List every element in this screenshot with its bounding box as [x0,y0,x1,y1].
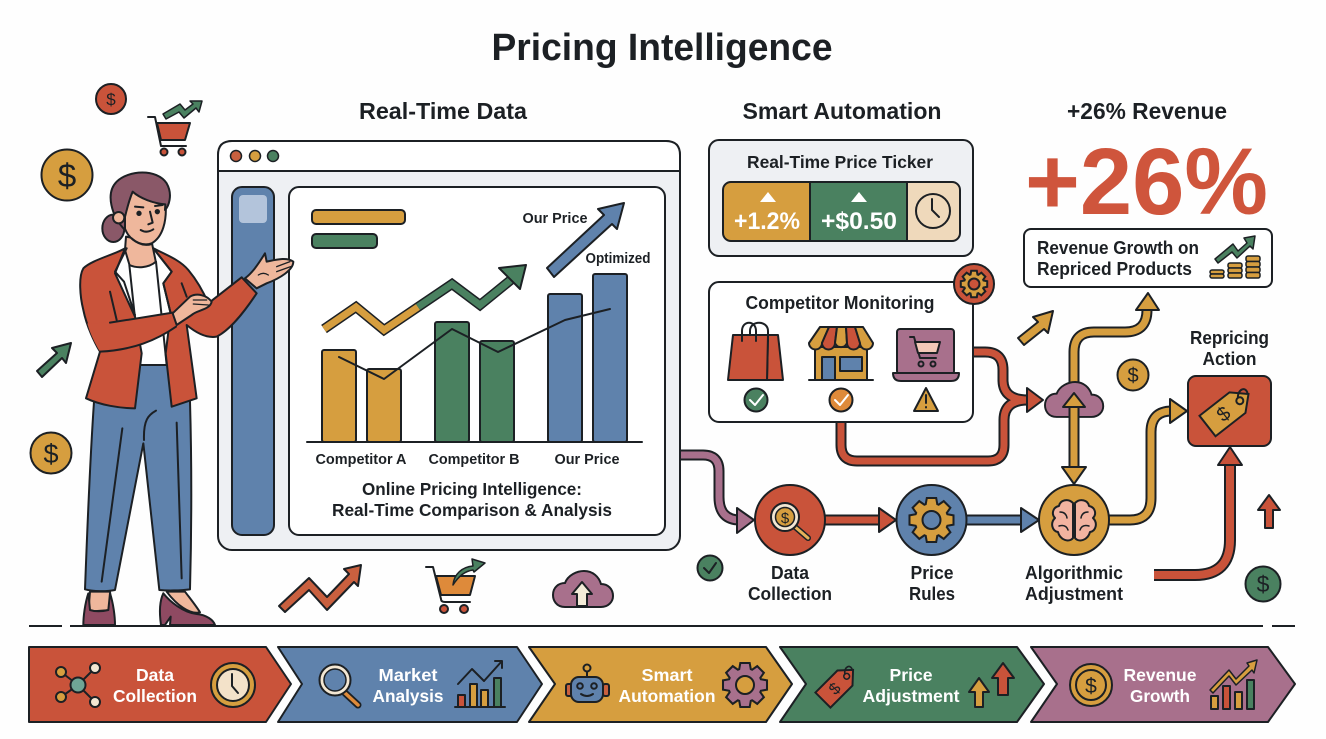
icon: red zigzag arrow [279,565,361,612]
label [1124,665,1197,706]
icon: cloud [1045,382,1103,417]
window sidebar [232,187,274,535]
label: optimized: Optimized [586,251,650,267]
step label: Collection [748,584,832,604]
callout text: Repriced Products [1037,259,1192,279]
chart caption: Real-Time Comparison & Analysis [332,500,612,520]
chart caption [332,479,612,520]
step: price rules [896,485,966,604]
step label: Adjustment [1025,584,1123,604]
icon: coins with rising arrow [1210,236,1260,278]
torso, head and arms [80,172,293,408]
icon: magnifier dollar: $ [781,510,790,527]
repricing action icon [1188,376,1271,446]
legend bars [312,210,405,248]
process chevron: market analysis [278,647,542,722]
icon: green dollar coin [1246,566,1280,602]
label: Data [136,665,174,685]
arrow: window to data collection [681,455,754,533]
icon: gear [909,498,954,542]
icon: magnifier [320,664,358,705]
callout: revenue growth [1024,229,1272,287]
step label: Price [910,563,954,583]
trend line [339,309,610,379]
step label: Algorithmic [1025,563,1123,583]
small red up arrow [1258,495,1280,528]
icon: price tag: $ [825,679,845,699]
label: Collection [113,686,197,706]
ticker strip: +1.2% [734,208,800,235]
label: Growth [1130,686,1190,706]
ground line [29,625,1295,627]
callout text: Revenue Growth on [1037,238,1199,258]
arrow: price rules to algorithm [966,508,1039,532]
big metric +26%: +26% [1025,129,1268,235]
two-way arrow: cloud and algorithm [1062,393,1086,484]
bar chart [307,274,642,442]
step label: Rules [909,584,955,604]
panel: real-time price ticker [709,140,973,256]
icon: red dollar coin: $ [106,90,116,109]
icon: cart with rising arrow [148,101,202,156]
icon: dollar coin: $ [1085,675,1097,698]
label: Revenue [1124,665,1197,685]
heading: real-time data: Real-Time Data [359,98,527,124]
label [113,665,197,706]
repricing action label: Repricing [1190,328,1269,348]
label: Adjustment [862,686,960,706]
panel: competitor monitoring [709,282,973,422]
arrow: algorithm to repricing [1106,399,1187,520]
label [862,665,960,706]
icon: gold coin near cloud: $ [1127,365,1139,387]
repricing action icon: $ [1213,402,1235,427]
icon: red dollar coin [96,84,126,114]
small gold arrow [1018,311,1053,345]
browser window panel [218,141,680,550]
axis labels: Competitor A [316,452,407,468]
label: Price [890,665,933,685]
label: Smart [642,665,693,685]
chart caption: Online Pricing Intelligence: [362,479,582,499]
icon: shopping bag [728,323,783,380]
process chevron: price adjustment [780,647,1044,722]
icon: network [56,663,100,707]
heading: revenue: +26% Revenue [1067,98,1227,124]
process chevron: smart automation [529,647,792,722]
icon: storefront [809,327,873,380]
title: Pricing Intelligence [492,27,832,69]
label: our price: Our Price [522,211,588,227]
monitoring heading: Competitor Monitoring [746,293,934,313]
axis labels: Our Price [554,452,620,468]
repricing action label [1190,328,1269,369]
step: algorithmic adjustment [1025,485,1123,604]
arrow: data collection to price rules [825,508,896,532]
icon: large gold dollar coin [42,150,92,200]
arrow: cloud up to revenue [1074,293,1159,390]
connector: competitor to cloud [841,352,1043,461]
person presenting [80,172,293,625]
icon: large gold dollar coin: $ [58,157,76,194]
legs and shoes [83,362,215,625]
icon: clock [211,663,255,707]
ticker strip [723,182,960,241]
icon: clock [916,194,950,228]
repricing action label: Action [1202,349,1256,369]
icon: settings gear badge [954,264,994,304]
blue rising arrow [547,203,624,277]
label [372,665,444,706]
process chevron: data collection [29,647,291,722]
icon: growth chart [1210,660,1257,709]
step: data collection [748,485,832,604]
zigzag trend arrow [324,265,526,330]
label [618,665,716,706]
icon: gold dollar coin lower [30,432,72,474]
icon: upload cloud [553,571,613,607]
icon: gear [723,663,767,707]
process chevron: revenue growth [1031,647,1295,722]
icon: gold coin near cloud [1118,360,1148,390]
label: Analysis [372,686,444,706]
step label: Data [771,563,810,583]
axis labels [316,452,620,468]
icon: green rising arrow [37,343,71,377]
icon: dollar coin [1070,664,1112,706]
icon: bar chart [455,661,505,707]
label: Automation [618,686,716,706]
arrow: up to repricing [1154,447,1242,575]
ticker strip: +$0.50 [821,208,897,235]
heading: smart automation: Smart Automation [742,98,942,124]
step label [1025,563,1123,604]
icon: brain [1052,500,1096,540]
ticker heading: Real-Time Price Ticker [747,152,933,172]
icon: gold dollar coin lower: $ [43,439,59,469]
label: Market [378,665,438,685]
icon: robot [566,664,609,702]
step label [909,563,955,604]
status icons [744,388,938,412]
icon: green dollar coin: $ [1257,571,1270,597]
icon: laptop cart [893,329,959,381]
icon: cart with arrow [426,559,485,613]
window control dots [230,150,278,162]
icon: green check [698,556,722,580]
axis labels: Competitor B [428,452,520,468]
callout text [1037,238,1199,279]
step label [748,563,832,604]
chart panel [289,187,665,535]
icon: up arrows [969,663,1014,707]
icon: price tag [815,662,861,708]
